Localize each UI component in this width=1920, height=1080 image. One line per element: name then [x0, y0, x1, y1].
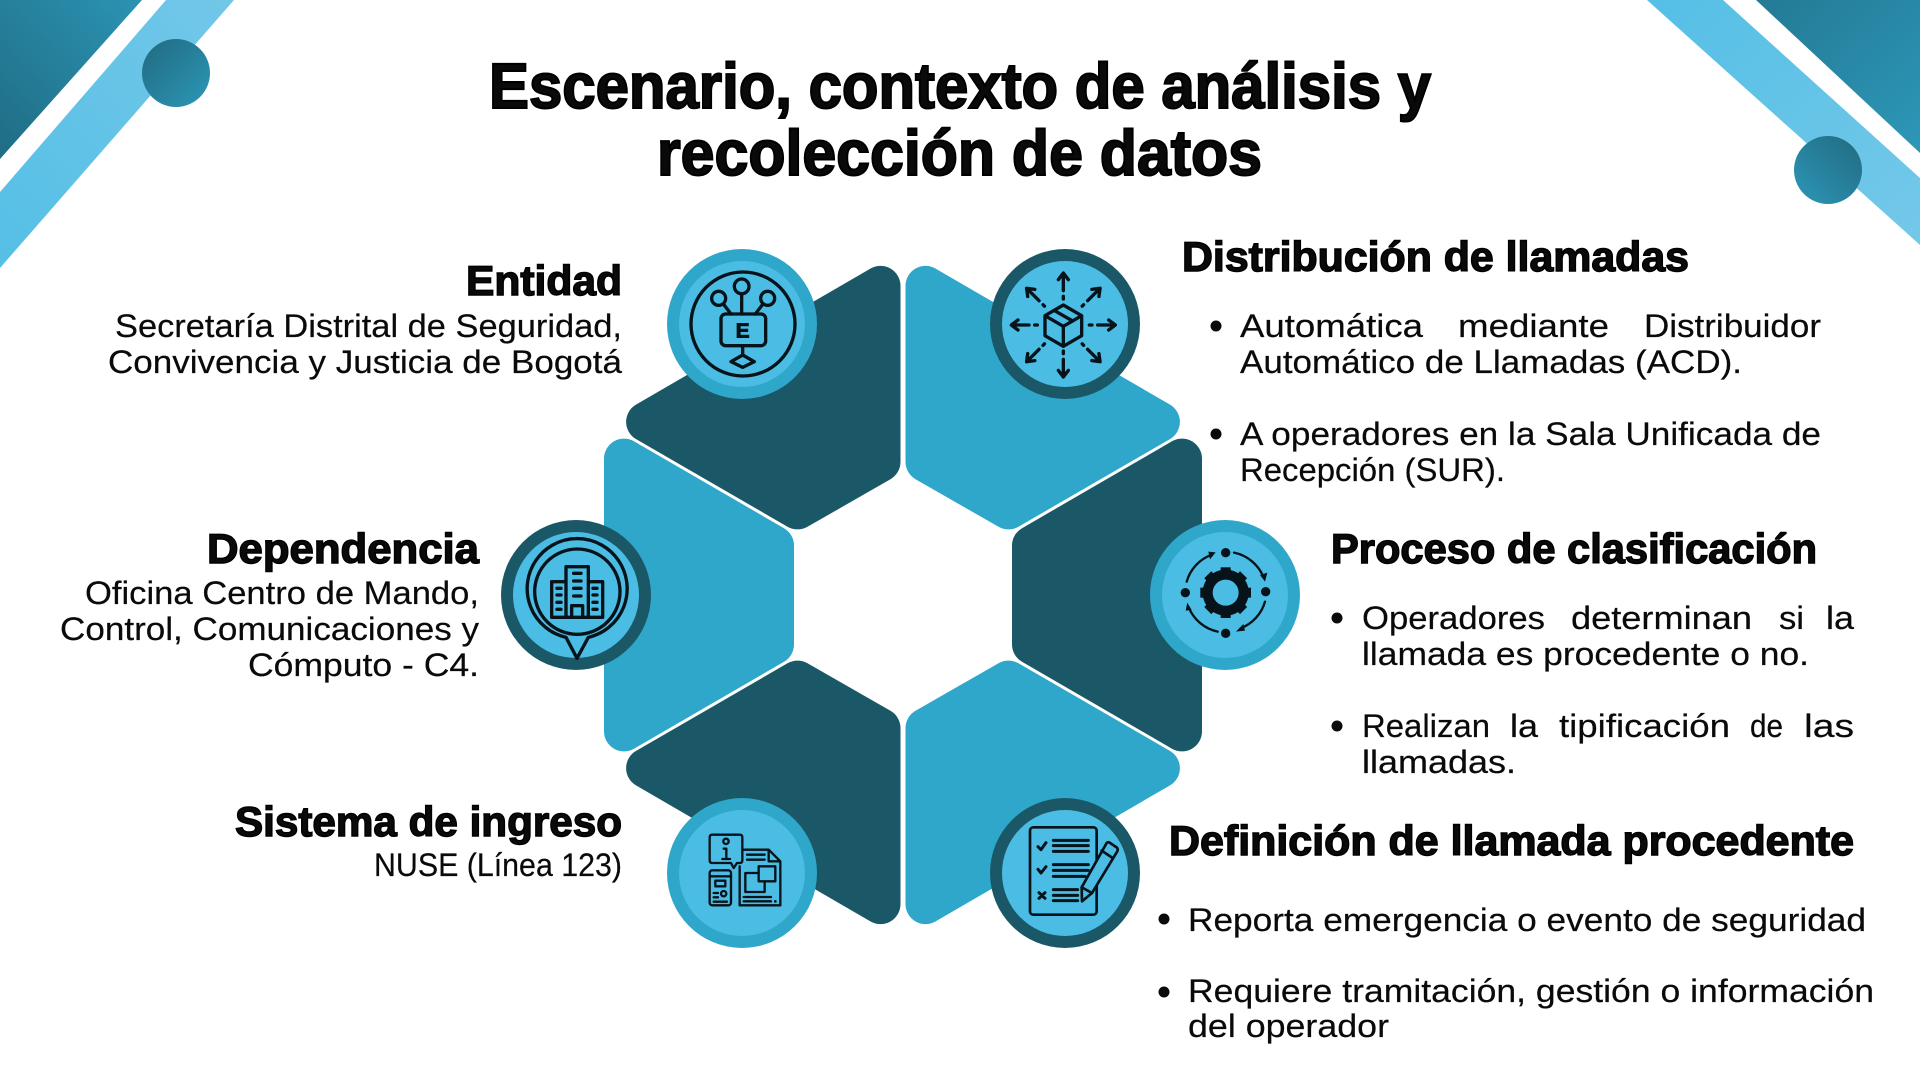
icon: information documents badge	[667, 798, 817, 948]
heading: Sistema de ingreso	[235, 798, 622, 845]
heading: Entidad	[466, 257, 622, 304]
text block: Distribución de llamadas	[1182, 233, 1821, 488]
text block: Proceso de clasificación	[1331, 525, 1854, 780]
segment: bottom left	[626, 661, 900, 924]
description	[108, 308, 622, 380]
bullet list	[1210, 308, 1821, 488]
bullet list: Automático de Llamadas (ACD).	[1240, 344, 1742, 380]
segment: left	[604, 439, 794, 751]
bullet list: Automática	[1240, 308, 1423, 344]
heading: Distribución de llamadas	[1182, 233, 1689, 280]
bullet list	[1332, 600, 1854, 780]
title	[489, 50, 1431, 189]
icon: entity hierarchy badge: E	[736, 320, 750, 343]
title: Escenario, contexto de análisis y	[489, 50, 1431, 122]
bullet list: mediante	[1458, 308, 1609, 344]
corner decoration: top left	[0, 0, 234, 268]
icon: checklist and pencil badge	[990, 798, 1140, 948]
text block: Entidad	[108, 257, 622, 380]
bullet list: Realizan	[1362, 708, 1490, 744]
segment: top left	[626, 266, 900, 529]
description: NUSE (Línea 123)	[374, 847, 622, 883]
description: Cómputo - C4.	[248, 647, 479, 683]
bullet list: si	[1779, 600, 1804, 636]
bullet list: tipificación	[1559, 708, 1730, 744]
text block: Definición de llamada procedente	[1158, 817, 1874, 1044]
icon: building location badge	[501, 520, 651, 670]
bullet list: Requiere tramitación, gestión o información	[1188, 973, 1874, 1009]
description: Oficina Centro de Mando,	[85, 575, 479, 611]
icon: entity hierarchy badge	[667, 249, 817, 399]
bullet list: A operadores en la Sala Unificada de	[1240, 416, 1821, 452]
segment: right	[1012, 439, 1202, 751]
text block: Sistema de ingreso	[235, 798, 622, 883]
description: Convivencia y Justicia de Bogotá	[108, 344, 622, 380]
bullet list: llamada es procedente o no.	[1362, 636, 1809, 672]
bullet list: la	[1510, 708, 1538, 744]
segment: top right	[906, 266, 1180, 529]
bullet list: Distribuidor	[1644, 308, 1821, 344]
bullet list	[1158, 902, 1874, 1044]
description: Secretaría Distrital de Seguridad,	[115, 308, 622, 344]
bullet list: Reporta emergencia o evento de seguridad	[1188, 902, 1866, 938]
corner decoration: top right	[1647, 0, 1920, 245]
hexagon ring diagram	[604, 266, 1202, 924]
bullet list: del operador	[1188, 1008, 1389, 1044]
bullet list: Operadores	[1362, 600, 1545, 636]
icon: gear process badge	[1150, 520, 1300, 670]
bullet list: determinan	[1571, 600, 1752, 636]
icon: package distribution badge	[990, 249, 1140, 399]
title: recolección de datos	[657, 117, 1262, 189]
bullet list: la	[1826, 600, 1854, 636]
bullet list: las	[1804, 708, 1854, 744]
heading: Definición de llamada procedente	[1169, 817, 1854, 864]
bullet list: llamadas.	[1362, 744, 1516, 780]
segment: bottom right	[906, 661, 1180, 924]
description: Control, Comunicaciones y	[60, 611, 479, 647]
bullet list: de	[1750, 708, 1783, 744]
heading: Proceso de clasificación	[1331, 525, 1817, 572]
text block: Dependencia	[60, 525, 480, 683]
heading: Dependencia	[207, 525, 480, 572]
description	[60, 575, 479, 683]
bullet list: Recepción (SUR).	[1240, 452, 1505, 488]
